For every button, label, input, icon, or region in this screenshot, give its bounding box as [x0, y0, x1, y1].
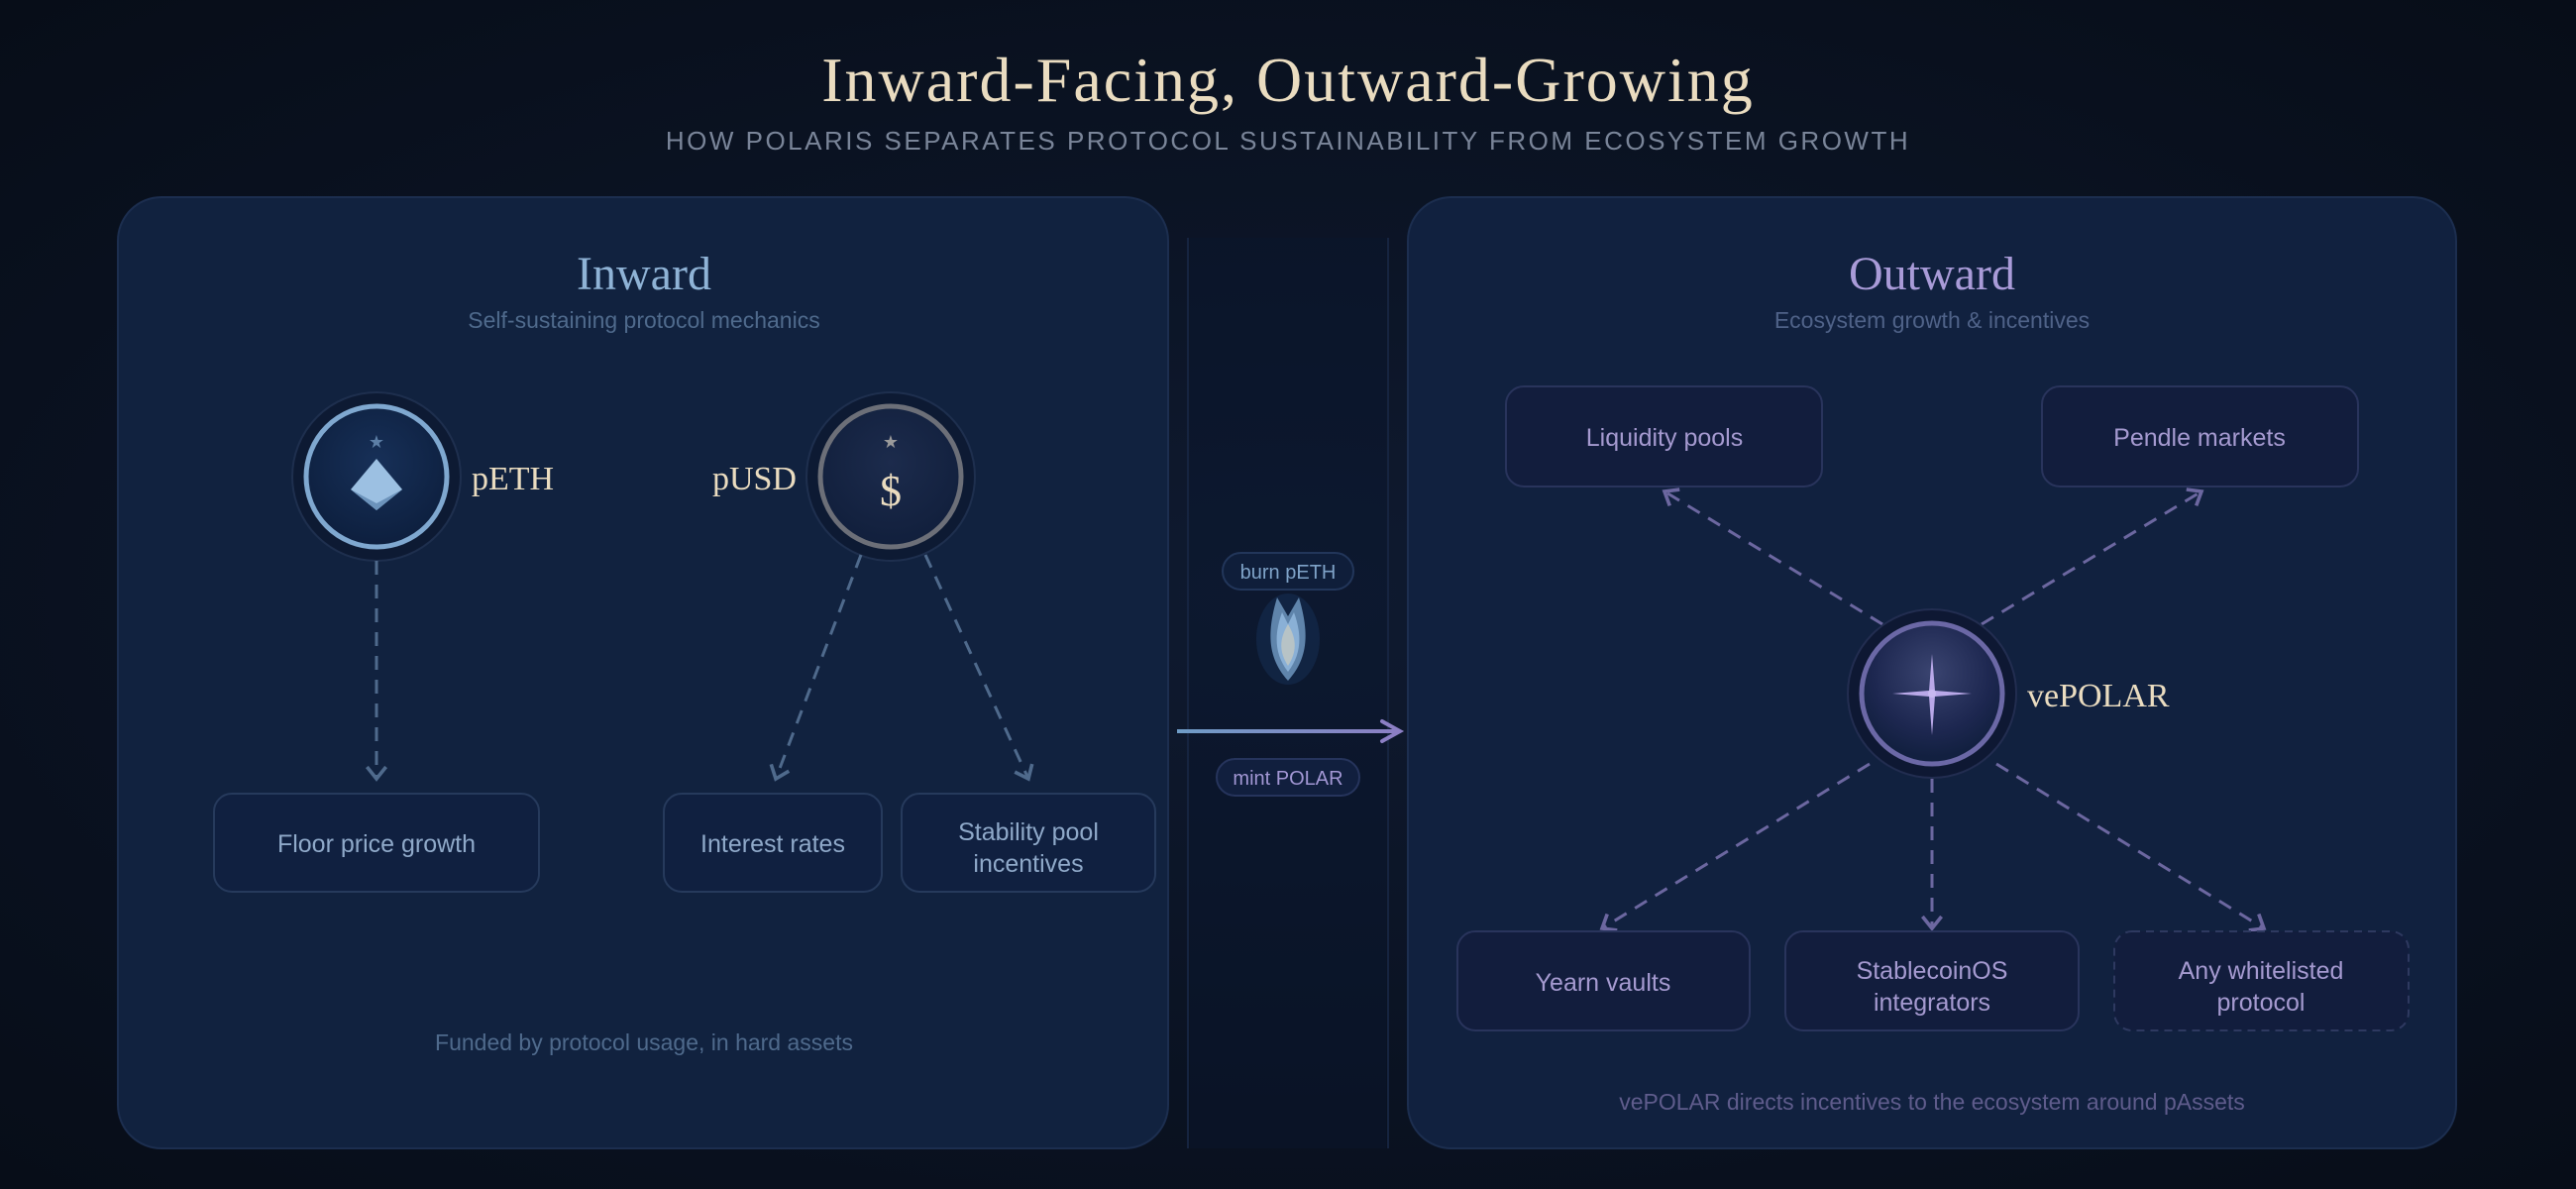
box: yearn vaults: Yearn vaults [1536, 969, 1670, 997]
outward heading: Outward [1849, 248, 2015, 300]
box: any whitelisted protocol: protocol [2217, 989, 2305, 1017]
arrows outward [1602, 491, 2264, 928]
inward heading: Inward [577, 248, 711, 300]
icon: pETH [292, 392, 461, 561]
footer: outward: vePOLAR directs incentives to the ecosystem around pAssets [1619, 1089, 2245, 1115]
icon: pETH: ★ [369, 432, 384, 452]
title: Inward-Facing, Outward-Growing [821, 45, 1755, 115]
box: any whitelisted protocol: Any whitelisted [2179, 957, 2343, 985]
pill: mint POLAR: mint POLAR [1233, 768, 1343, 790]
center: burn/mint [1177, 238, 1400, 1148]
icon: vePOLAR [1848, 609, 2016, 778]
pill: burn pETH [1223, 553, 1353, 590]
box: stability pool incentives: incentives [973, 850, 1084, 878]
box: interest rates: Interest rates [700, 830, 845, 858]
label vePOLAR: vePOLAR [2027, 678, 2170, 714]
icon: pUSD: ★ [883, 432, 899, 452]
box: floor price growth [214, 794, 539, 892]
icon: pUSD: $ [880, 467, 902, 515]
box: stability pool incentives: Stability pool [958, 818, 1099, 846]
pill: mint POLAR [1217, 759, 1359, 796]
box: stability pool incentives [902, 794, 1155, 892]
arrows inward [376, 555, 1028, 779]
box: interest rates [664, 794, 882, 892]
inward subheading: Self-sustaining protocol mechanics [468, 307, 820, 333]
label pETH: pETH [472, 461, 554, 497]
subtitle: HOW POLARIS SEPARATES PROTOCOL SUSTAINABILITY FROM ECOSYSTEM GROWTH [666, 126, 1910, 156]
box: yearn vaults [1457, 931, 1750, 1030]
box: stablecoinOS integrators: integrators [1874, 989, 1990, 1017]
box: liquidity pools [1506, 386, 1822, 486]
box: stablecoinOS integrators [1785, 931, 2079, 1030]
box: stablecoinOS integrators: StablecoinOS [1857, 957, 2007, 985]
label pUSD: pUSD [712, 461, 797, 497]
outward subheading: Ecosystem growth & incentives [1774, 307, 2090, 333]
panel: inward [118, 197, 1168, 1148]
pill: burn pETH: burn pETH [1240, 562, 1336, 584]
panel: outward [1408, 197, 2456, 1148]
box: any whitelisted protocol [2114, 931, 2409, 1030]
icon: pUSD [806, 392, 975, 561]
box: pendle markets: Pendle markets [2113, 424, 2286, 452]
box: pendle markets [2042, 386, 2358, 486]
box: floor price growth: Floor price growth [277, 830, 476, 858]
arrow: inward to outward [1177, 721, 1400, 741]
footer: inward: Funded by protocol usage, in hard assets [435, 1029, 853, 1055]
icon: flame [1256, 594, 1320, 685]
box: liquidity pools: Liquidity pools [1586, 424, 1743, 452]
